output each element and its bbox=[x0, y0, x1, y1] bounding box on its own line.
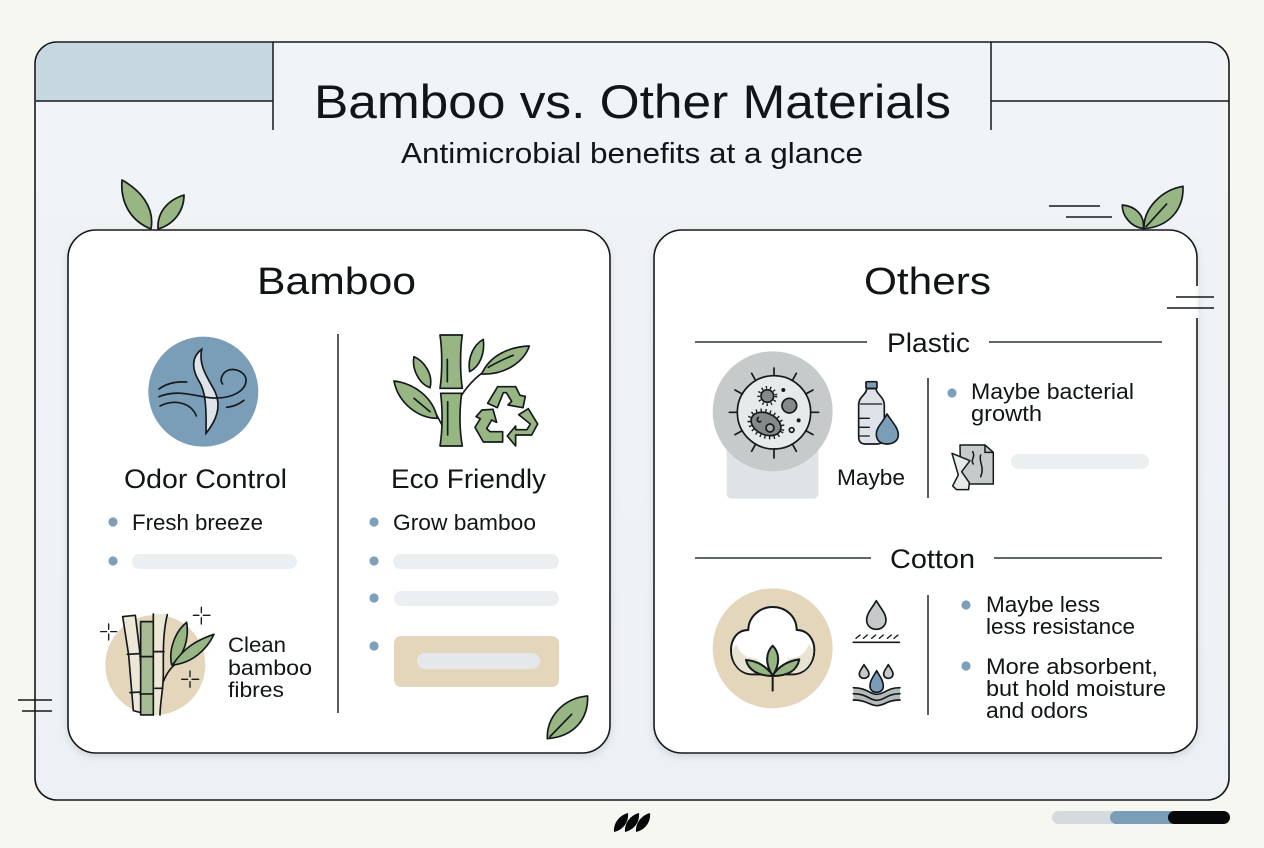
icon: cotton boll bbox=[713, 588, 833, 708]
title: Bamboo vs. Other Materials bbox=[314, 75, 951, 128]
clean bamboo fibres label: bamboo bbox=[228, 657, 312, 680]
cotton column divider bbox=[927, 595, 929, 715]
bamboo column divider bbox=[337, 334, 339, 713]
plastic bullet: bacterial growth: Maybe bacterial bbox=[971, 379, 1134, 404]
placeholder bar bbox=[1011, 454, 1149, 469]
bamboo heading: Bamboo bbox=[257, 261, 416, 303]
progress bar bbox=[1052, 811, 1230, 824]
panel: others bbox=[654, 230, 1197, 753]
icon: torn plastic sheet bbox=[952, 445, 993, 490]
plastic column divider bbox=[927, 378, 929, 498]
icon: top-left leaves bbox=[122, 180, 184, 229]
header band: top-left blue block and rules bbox=[36, 42, 1229, 130]
cotton bullet: less resistance: Maybe less bbox=[986, 592, 1100, 617]
eco bullet: grow bamboo: Grow bamboo bbox=[393, 510, 536, 535]
cotton bullet: absorbent: More absorbent, bbox=[986, 654, 1158, 679]
odor bullet: fresh breeze: Fresh breeze bbox=[132, 510, 263, 535]
icon: water soaking into fabric bbox=[853, 665, 900, 706]
icon: top-right leaves bbox=[1122, 186, 1183, 229]
cotton bullet: absorbent: and odors bbox=[986, 698, 1088, 723]
eco bullet: placeholder bar one bbox=[369, 554, 559, 569]
others heading: Others bbox=[864, 261, 991, 303]
maybe label: Maybe bbox=[837, 465, 905, 490]
decorative motion lines: top right bbox=[1049, 206, 1112, 217]
cotton heading with rules: Cotton bbox=[890, 544, 975, 574]
plastic bullet: bacterial growth: growth bbox=[971, 401, 1042, 426]
icon: footer logo bbox=[614, 813, 650, 832]
icon: eco friendly bamboo and recycling bbox=[394, 335, 538, 446]
icon: corner leaf bbox=[547, 696, 588, 739]
panel: bamboo bbox=[68, 230, 610, 753]
cotton bullet: less resistance: less resistance bbox=[986, 614, 1135, 639]
icon: bacteria in grey circle bbox=[713, 351, 833, 499]
eco friendly heading: Eco Friendly bbox=[391, 464, 547, 494]
icon: plastic bottle with drop bbox=[859, 382, 898, 444]
subtitle: Antimicrobial benefits at a glance bbox=[401, 138, 863, 170]
cotton bullet: less resistance bbox=[961, 592, 1135, 639]
clean bamboo fibres label: Clean bbox=[228, 634, 286, 657]
eco bullet: tan callout bbox=[369, 636, 559, 687]
icon: odor control breeze bbox=[148, 337, 258, 447]
decorative motion lines: right edge bbox=[1167, 286, 1214, 318]
cotton bullet: absorbent bbox=[961, 654, 1166, 723]
odor bullet: placeholder bar bbox=[108, 554, 297, 569]
eco bullet: placeholder bar two bbox=[369, 591, 559, 606]
icon: clean bamboo fibres bbox=[101, 607, 214, 715]
plastic heading with rules: Plastic bbox=[887, 328, 970, 358]
plastic bullet: bacterial growth bbox=[947, 379, 1134, 426]
clean bamboo fibres label: fibres bbox=[228, 679, 284, 702]
cotton bullet: absorbent: but hold moisture bbox=[986, 676, 1166, 701]
odor control heading: Odor Control bbox=[124, 464, 287, 494]
icon: water drop on surface bbox=[853, 601, 899, 642]
decorative motion lines: left edge bbox=[18, 700, 52, 711]
